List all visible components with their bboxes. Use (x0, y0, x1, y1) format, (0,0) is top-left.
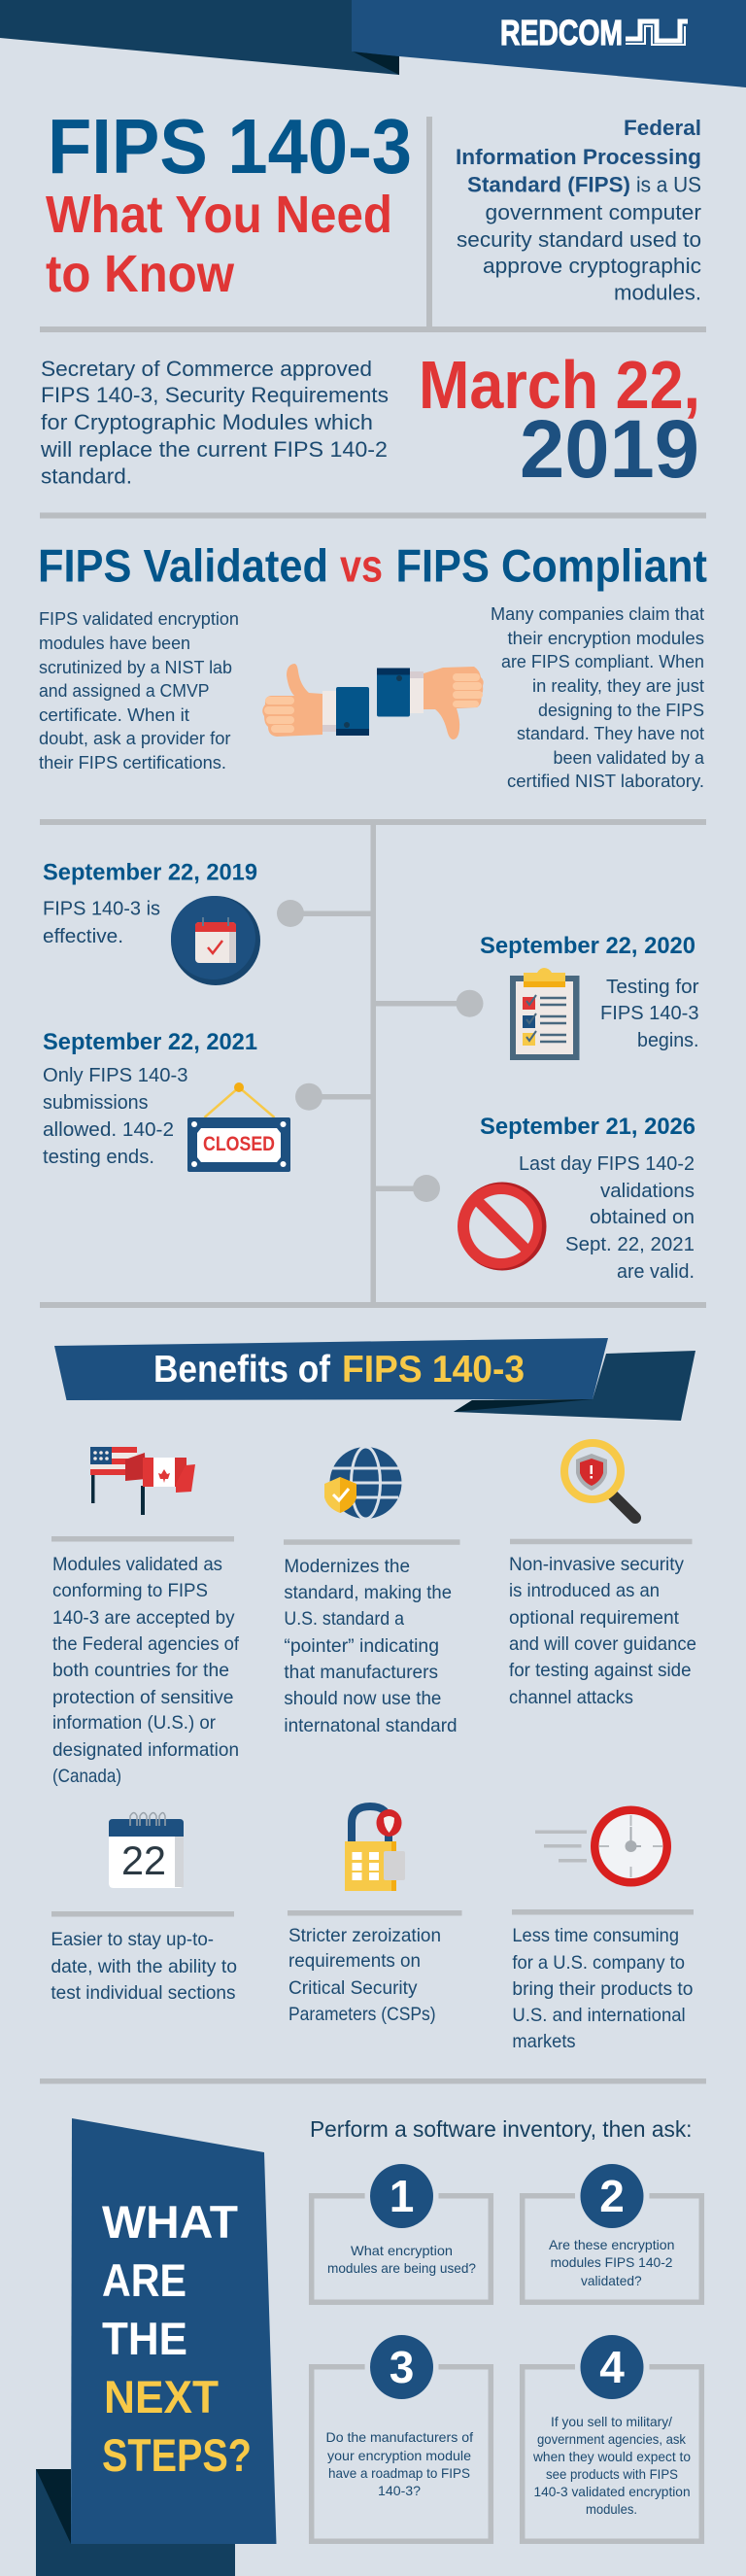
text block: benefit 3: Non-invasive security (509, 1554, 684, 1575)
text block: benefit 2: that manufacturers (284, 1662, 438, 1683)
text block: Secretary of Commerce: for Cryptographic Modules which (41, 410, 373, 434)
banner: What are the next steps: STEPS? (102, 2429, 252, 2481)
text block: FIPS definition: is a US (636, 173, 701, 196)
text block: benefit 3: for testing against side (509, 1660, 692, 1681)
icon: calendar 22 (109, 1813, 184, 1888)
text block: FIPS validated: FIPS validated encryption (39, 609, 239, 629)
heading: FIPS Validated vs FIPS Compliant: vs (340, 540, 383, 591)
text block: benefit 4 (51, 1929, 237, 2004)
step 1: What encryption (351, 2243, 453, 2258)
text block: Secretary of Commerce (40, 357, 389, 488)
timeline: September 22, 2021 (43, 1029, 257, 1168)
timeline: September 22, 2021: submissions (43, 1092, 148, 1114)
text block: Secretary of Commerce: Secretary of Commerce approved (41, 357, 372, 381)
step 1: modules are being used? (327, 2260, 476, 2276)
step 2: modules FIPS 140-2 (551, 2254, 673, 2270)
timeline: September 21, 2026: obtained on (590, 1207, 695, 1228)
timeline: September 22, 2020: begins. (637, 1030, 699, 1051)
text block: benefit 2: “pointer” indicating (284, 1635, 439, 1657)
text block: FIPS compliant: been validated by a (554, 748, 705, 768)
step 4: government agencies, ask (537, 2431, 687, 2447)
text block: FIPS definition: approve cryptographic (483, 254, 701, 278)
timeline: September 21, 2026: Sept. 22, 2021 (565, 1234, 695, 1255)
icon: magnifier with shield (564, 1443, 635, 1518)
timeline: September 22, 2019: September 22, 2019 (43, 859, 257, 886)
text block: benefit 3: channel attacks (509, 1687, 633, 1708)
icon: speeding clock (535, 1805, 671, 1887)
heading: FIPS Validated vs FIPS Compliant: FIPS Compliant (396, 540, 707, 591)
text block: benefit 6: markets (512, 2031, 576, 2052)
heading: FIPS Validated vs FIPS Compliant: FIPS Validated (38, 540, 328, 591)
text block: FIPS definition: Standard (FIPS) (467, 173, 630, 196)
timeline: September 21, 2026: Last day FIPS 140-2 (519, 1153, 695, 1175)
title: What You Need (46, 186, 392, 244)
text block: benefit 1: information (U.S.) or (52, 1712, 216, 1734)
step 2: 2 (599, 2171, 625, 2221)
banner: What are the next steps (36, 2118, 276, 2576)
step 3: your encryption module (327, 2448, 471, 2463)
text block: FIPS definition: modules. (614, 280, 701, 305)
step 3: 140-3? (378, 2483, 421, 2498)
text block: FIPS validated: doubt, ask a provider for (39, 729, 231, 748)
step 3: Do the manufacturers of (326, 2429, 473, 2445)
timeline: September 21, 2026 (480, 1114, 695, 1283)
timeline: September 21, 2026: validations (600, 1181, 695, 1202)
banner: Benefits of FIPS 140-3 (54, 1338, 695, 1421)
text block: benefit 4: Easier to stay up-to- (51, 1929, 214, 1950)
title: FIPS 140-3 (48, 103, 412, 189)
banner: What are the next steps: NEXT (104, 2371, 219, 2422)
text block: FIPS definition: security standard used to (457, 227, 701, 252)
text block: benefit 1: protection of sensitive (52, 1687, 233, 1708)
banner: Benefits of FIPS 140-3: FIPS 140-3 (342, 1349, 525, 1391)
text block: Secretary of Commerce: will replace the current FIPS 140-2 (40, 437, 388, 462)
text block: FIPS compliant: certified NIST laboratory. (507, 772, 704, 791)
timeline: September 22, 2021: allowed. 140-2 (43, 1119, 174, 1141)
text block: benefit 6 (512, 1925, 694, 2052)
icon: calendar check (171, 896, 260, 985)
text block: benefit 2: internatonal standard (284, 1715, 458, 1736)
text block: FIPS validated: their FIPS certifications. (39, 753, 226, 773)
icon: checklist clipboard (510, 968, 579, 1060)
icon: US and Canada flags (90, 1447, 195, 1515)
text block: FIPS compliant: their encryption modules (507, 629, 704, 648)
text block: FIPS definition (456, 116, 701, 305)
step 4: If you sell to military/ (551, 2414, 672, 2429)
date: March 22, 2019 (419, 347, 700, 495)
timeline: September 22, 2020: Testing for (606, 977, 699, 998)
text block: benefit 5: Stricter zeroization (288, 1925, 441, 1946)
logo: REDCOM: REDCOM (500, 13, 623, 52)
step 3 (312, 2335, 491, 2541)
text block: benefit 2: Modernizes the (284, 1556, 410, 1577)
icon: padlock (345, 1806, 405, 1891)
icon: thumbs up and thumbs down (262, 664, 484, 739)
title (46, 103, 412, 303)
icon: closed sign: CLOSED (203, 1133, 275, 1155)
text block: benefit 1: conforming to FIPS (52, 1580, 208, 1601)
text block: benefit 6: U.S. and international (512, 2005, 686, 2026)
step 2 (523, 2164, 701, 2302)
text block: benefit 1: the Federal agencies of (52, 1633, 240, 1655)
icon: calendar 22: 22 (121, 1838, 166, 1883)
text block: FIPS compliant (491, 604, 705, 791)
timeline: September 22, 2019: FIPS 140-3 is (43, 898, 160, 919)
text block: benefit 3: and will cover guidance (509, 1633, 696, 1655)
text block: benefit 1: (Canada) (52, 1766, 121, 1787)
step 4 (523, 2335, 701, 2541)
text block: FIPS compliant: in reality, they are just (532, 676, 704, 696)
text block: FIPS compliant: designing to the FIPS (538, 701, 704, 720)
text block: benefit 6: Less time consuming (512, 1925, 679, 1946)
text block: Secretary of Commerce: FIPS 140-3, Security Requirements (41, 383, 389, 407)
banner: What are the next steps: THE (102, 2313, 187, 2364)
heading: software inventory: Perform a software inventory, then ask: (310, 2116, 692, 2142)
text block: benefit 2: standard, making the (284, 1582, 452, 1603)
icon: globe with shield (324, 1447, 402, 1519)
timeline: September 22, 2019 (43, 859, 257, 947)
text block: benefit 2: should now use the (284, 1688, 441, 1709)
text block: benefit 5: Critical Security (288, 1977, 418, 1999)
header ribbon (0, 0, 746, 87)
step 3: have a roadmap to FIPS (328, 2465, 470, 2481)
timeline: September 22, 2021: testing ends. (43, 1147, 154, 1168)
text block: benefit 1: Modules validated as (52, 1554, 222, 1575)
icon: prohibited sign (458, 1182, 546, 1271)
timeline: September 22, 2020: September 22, 2020 (480, 933, 695, 959)
text block: benefit 3 (509, 1554, 696, 1708)
timeline: September 22, 2021: September 22, 2021 (43, 1029, 257, 1055)
text block: FIPS validated: certificate. When it (39, 705, 189, 725)
timeline markers (277, 900, 484, 1202)
text block: benefit 3: is introduced as an (509, 1580, 660, 1601)
text block: FIPS compliant: are FIPS compliant. When (501, 652, 704, 671)
text block: benefit 5 (288, 1925, 441, 2025)
timeline: September 22, 2020 (480, 933, 699, 1051)
step 1: 1 (390, 2171, 414, 2221)
title: to Know (46, 245, 235, 303)
banner: Benefits of FIPS 140-3: Benefits of (153, 1349, 331, 1391)
text block: benefit 1 (52, 1554, 240, 1787)
step 4: 4 (599, 2342, 625, 2392)
text block: benefit 2: U.S. standard a (284, 1608, 404, 1630)
text block: FIPS definition: government computer (486, 200, 701, 224)
text block: benefit 3: optional requirement (509, 1607, 680, 1629)
step 4: see products with FIPS (546, 2466, 678, 2482)
step 1 (312, 2164, 491, 2302)
text block: FIPS validated (39, 609, 239, 773)
text block: benefit 1: designated information (52, 1739, 239, 1761)
text block: FIPS definition: Federal (624, 116, 701, 140)
text block: benefit 1: 140-3 are accepted by (52, 1607, 235, 1629)
step 4: when they would expect to (532, 2449, 691, 2464)
timeline: September 21, 2026: September 21, 2026 (480, 1114, 695, 1140)
text block: benefit 6: for a U.S. company to (512, 1952, 685, 1974)
step 4: modules. (586, 2501, 637, 2517)
text block: benefit 2 (284, 1556, 458, 1736)
text block: benefit 6: bring their products to (512, 1978, 694, 2000)
text block: FIPS definition: Information Processing (456, 145, 701, 169)
text block: FIPS compliant: Many companies claim that (491, 604, 704, 624)
timeline: September 22, 2019: effective. (43, 926, 123, 947)
text block: FIPS compliant: standard. They have not (517, 724, 704, 743)
step 4: 140-3 validated encryption (534, 2484, 691, 2499)
timeline: September 22, 2020: FIPS 140-3 (600, 1003, 699, 1024)
text block: benefit 4: test individual sections (51, 1982, 236, 2004)
text block: benefit 4: date, with the ability to (51, 1956, 237, 1977)
step 2: Are these encryption (549, 2237, 674, 2252)
date: March 22, 2019: 2019 (520, 403, 699, 495)
timeline: September 21, 2026: are valid. (617, 1261, 695, 1283)
text block: Secretary of Commerce: standard. (41, 464, 132, 488)
text block: benefit 5: requirements on (288, 1950, 421, 1972)
icon: closed sign (187, 1082, 290, 1172)
timeline: September 22, 2021: Only FIPS 140-3 (43, 1065, 188, 1086)
text block: benefit 5: Parameters (CSPs) (288, 2004, 436, 2025)
banner: What are the next steps: ARE (102, 2254, 186, 2306)
date: March 22, 2019: March 22, (419, 347, 700, 423)
step 3: 3 (390, 2342, 414, 2392)
text block: FIPS validated: and assigned a CMVP (39, 681, 210, 701)
step 2: validated? (581, 2273, 642, 2288)
text block: FIPS validated: modules have been (39, 634, 190, 653)
heading: FIPS Validated vs FIPS Compliant (38, 540, 707, 591)
text block: benefit 1: both countries for the (52, 1660, 229, 1681)
text block: FIPS validated: scrutinized by a NIST lab (39, 658, 232, 677)
banner: What are the next steps: WHAT (102, 2196, 238, 2248)
